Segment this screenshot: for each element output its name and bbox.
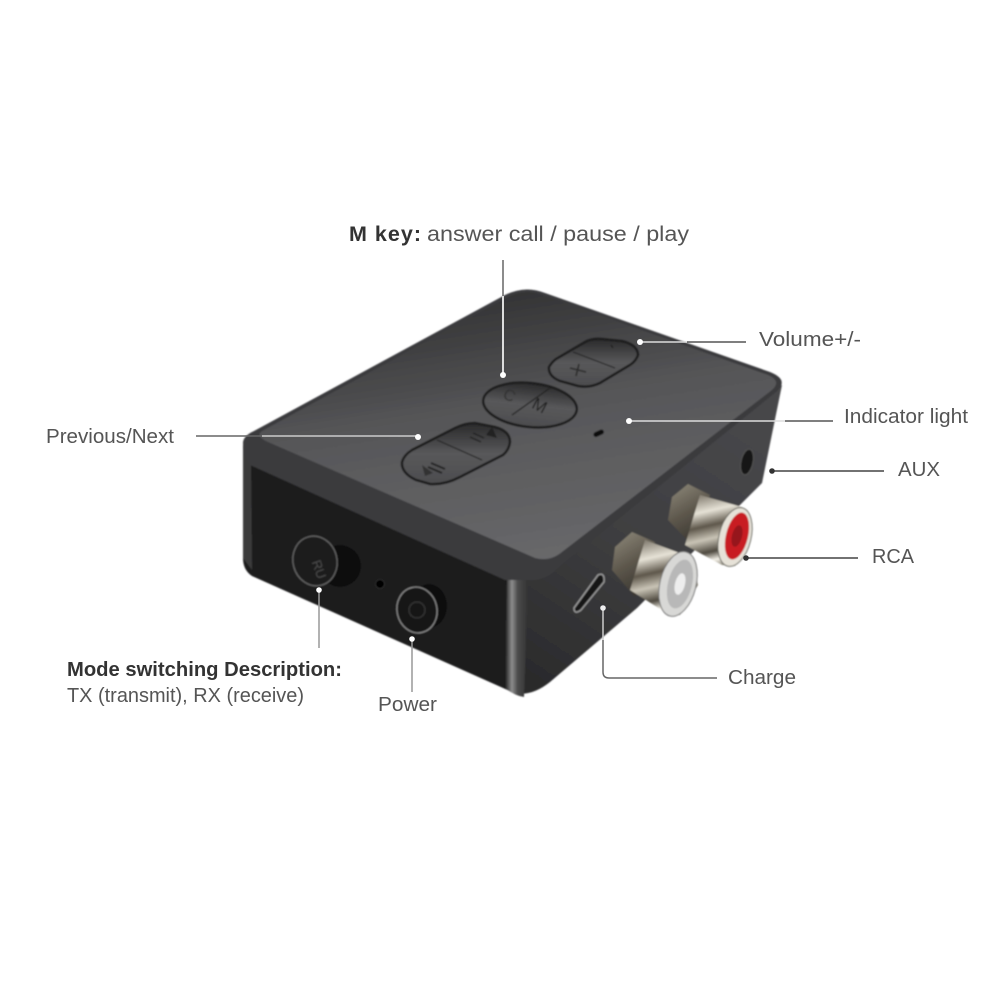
M / phone button: M [529,394,550,417]
device silver corner edge [505,578,528,697]
volume leader [637,339,746,345]
red RCA connector [668,484,758,570]
microphone hole [376,580,384,588]
RCA leader [743,555,858,561]
mode switch [287,531,361,591]
label: indicator light: Indicator light [844,406,968,428]
mode leader [316,587,322,648]
indicator leader [626,418,833,424]
device front face [243,445,525,692]
USB charge port [574,574,604,612]
white RCA connector [612,532,703,620]
charge leader [600,605,717,678]
leader lines [196,260,884,692]
M key leader [500,260,506,378]
M / phone button [481,378,579,432]
AUX jack [738,448,756,476]
label: M key: M key: [349,222,421,246]
device top face [260,292,776,559]
label: AUX: AUX [898,459,940,481]
power button [393,583,447,637]
label: mode switching description: Mode switching Description: [67,658,342,681]
AUX leader [769,468,884,474]
power leader [409,636,415,692]
volume button [549,339,638,387]
label: charge: Charge [728,667,796,689]
label: RCA: RCA [872,546,915,568]
label: mode switching description: TX (transmit), RX (receive) [67,685,304,707]
device right side face [505,385,782,694]
device top bezel [243,289,782,580]
indicator light [593,429,605,438]
label: power: Power [378,694,437,716]
product: audio adapter device [243,289,782,697]
front face left strip [243,448,252,570]
label: previous/next: Previous/Next [46,426,174,448]
mode switch: RU [309,558,329,581]
M / phone button: C [500,386,518,406]
label: M key: answer call / pause / play [427,222,689,246]
previous/next leader [196,434,421,440]
label: volume: Volume+/- [759,329,861,351]
previous/next button [402,423,510,484]
